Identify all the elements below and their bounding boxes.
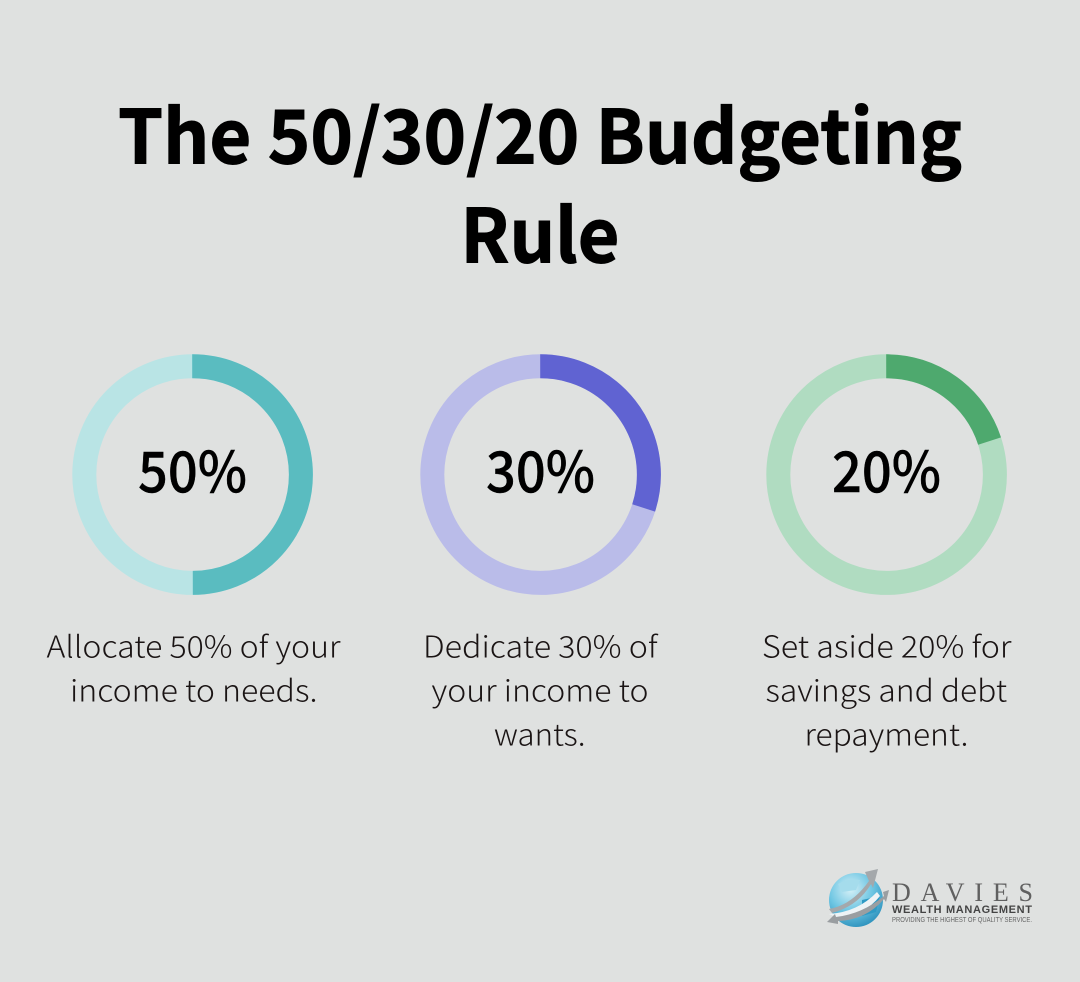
description: wants: Dedicate 30% of — [423, 622, 659, 666]
wordmark — [892, 878, 1033, 924]
logo: Davies Wealth Management — [827, 869, 1033, 927]
value: 30%: 30% — [486, 428, 595, 509]
description: savings: savings and debt — [766, 666, 1007, 710]
wordmark: DAVIES — [892, 878, 1033, 907]
description: wants: wants. — [494, 710, 586, 754]
description: wants — [423, 622, 659, 754]
panel: 50% needs — [46, 366, 341, 710]
panel: 20% savings — [762, 366, 1012, 754]
description: needs: Allocate 50% of your — [46, 622, 341, 666]
donut chart: 50% — [84, 366, 301, 583]
title — [118, 78, 962, 284]
description: savings: repayment. — [804, 710, 968, 754]
icon: globe with arrows — [827, 869, 889, 927]
wordmark: PROVIDING THE HIGHEST OF QUALITY SERVICE. — [892, 917, 1032, 924]
title: The 50/30/20 Budgeting — [118, 78, 962, 186]
value: 50%: 50% — [138, 428, 247, 509]
description: savings — [762, 622, 1012, 754]
description: savings: Set aside 20% for — [762, 622, 1012, 666]
panel: 30% wants — [423, 366, 659, 754]
description: needs — [46, 622, 341, 710]
title: Rule — [460, 178, 620, 284]
donut chart: 30% — [432, 366, 649, 583]
description: needs: income to needs. — [70, 666, 318, 710]
description: wants: your income to — [432, 666, 648, 710]
wordmark: WEALTH MANAGEMENT — [892, 904, 1032, 916]
value: 20%: 20% — [832, 428, 941, 509]
donut chart: 20% — [778, 366, 995, 583]
